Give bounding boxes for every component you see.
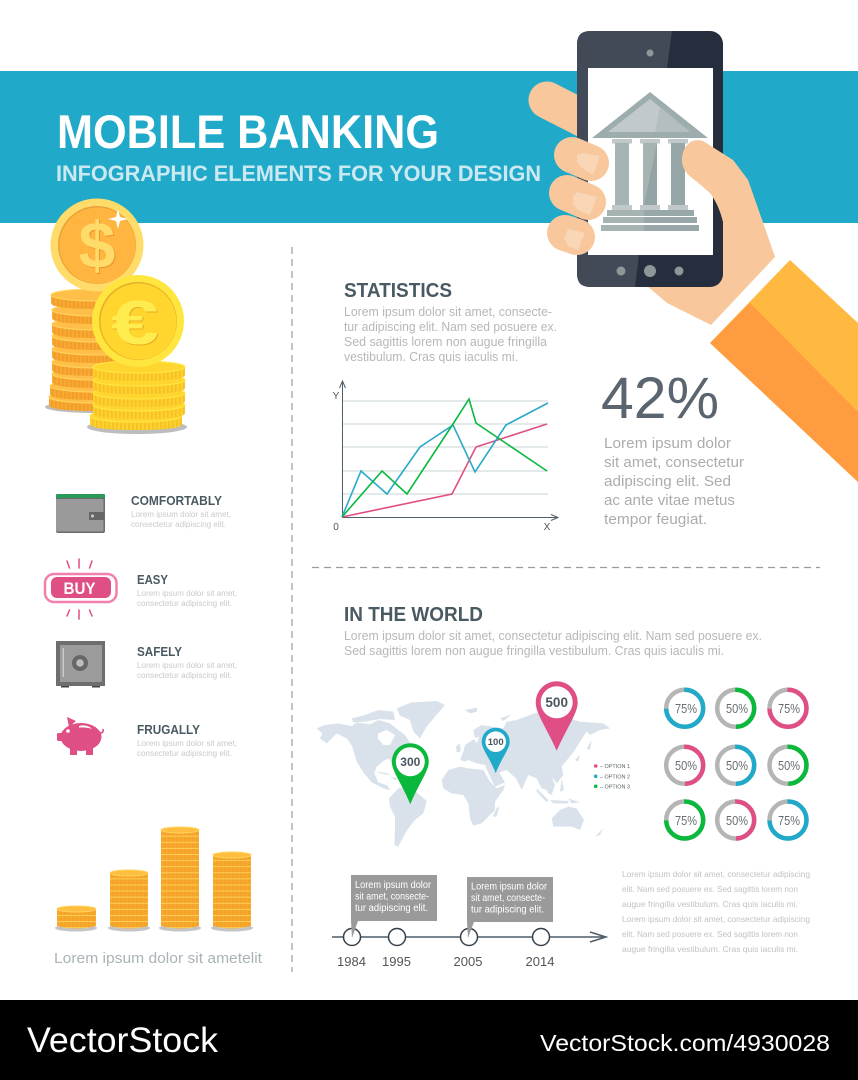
timeline years: 1984 xyxy=(337,954,366,969)
map pin: 300 xyxy=(392,743,429,804)
feature: frugally: FRUGALLY xyxy=(137,723,201,737)
icon: wallet xyxy=(56,494,105,533)
map legend: – OPTION 1 xyxy=(600,764,630,770)
donut: blue 75%: 75% xyxy=(675,701,697,716)
timeline years: 2014 xyxy=(526,954,554,969)
side paragraph: Lorem ipsum dolor sit amet, consectetur adipiscing xyxy=(622,914,810,924)
coins illustration xyxy=(45,198,187,434)
feature: easy: consectetur adipiscing elit. xyxy=(137,599,232,608)
stat description: Lorem ipsum dolor xyxy=(604,436,731,452)
icon: piggy bank xyxy=(57,717,103,755)
donut: pink 50% xyxy=(666,747,703,784)
stat description: adipiscing elit. Sed xyxy=(604,474,731,490)
feature: safely: SAFELY xyxy=(137,645,183,659)
donut: blue 50% xyxy=(717,747,754,784)
callout: 2005: tur adipiscing elit. xyxy=(471,904,544,916)
sleeve xyxy=(710,260,858,482)
feature: safely: Lorem ipsum dolor sit amet, xyxy=(137,661,237,670)
donut: blue 50%: 50% xyxy=(726,758,748,773)
phone xyxy=(577,31,723,287)
feature: comfortably xyxy=(56,494,231,533)
donut: blue 75% xyxy=(666,690,703,727)
statistics text: vestibulum. Cras quis iaculis mi. xyxy=(344,350,518,364)
callout: 1984: tur adipiscing elit. xyxy=(355,903,428,914)
feature: safely xyxy=(56,641,237,688)
footer logo: VectorStock xyxy=(27,1021,219,1060)
feature: comfortably: Lorem ipsum dolor sit amet, xyxy=(131,510,231,519)
world text: Lorem ipsum dolor sit amet, consectetur adipiscing elit. Nam sed posuere ex. xyxy=(344,629,762,643)
stat description: sit amet, consectetur xyxy=(604,455,744,471)
world map xyxy=(317,701,610,847)
icon: buy button xyxy=(45,559,116,619)
coin stack: orange xyxy=(45,289,144,413)
map legend: – OPTION 2 xyxy=(600,774,630,780)
donut: green 50% second: 50% xyxy=(778,758,800,773)
side paragraph: elit. Nam sed posuere ex. Sed sagittis lorem non xyxy=(622,884,798,894)
map legend: – OPTION 3 xyxy=(600,784,630,790)
donut: green 75%: 75% xyxy=(675,813,697,828)
feature: frugally: Lorem ipsum dolor sit amet, xyxy=(137,739,237,748)
callout: 2005: sit amet, consecte- xyxy=(471,893,545,904)
callout: 2005: Lorem ipsum dolor xyxy=(471,882,548,892)
donut: pink 50%: 50% xyxy=(675,758,697,773)
timeline xyxy=(332,875,606,969)
side paragraph xyxy=(622,869,810,954)
world text xyxy=(344,629,762,658)
donut: green 75% xyxy=(666,802,703,838)
callout: 2005 xyxy=(467,877,553,938)
title: MOBILE BANKING xyxy=(57,105,439,158)
world text: Sed sagittis lorem non augue fringilla vestibulum. Cras quis iaculis mi. xyxy=(344,644,724,658)
feature: easy: EASY xyxy=(137,573,169,587)
donut: pink 75%: 75% xyxy=(778,701,800,716)
coin: dollar xyxy=(50,198,144,292)
icon: bank building xyxy=(592,92,708,231)
stat description xyxy=(604,436,744,528)
line chart xyxy=(333,381,558,533)
map legend xyxy=(594,764,630,790)
thumb xyxy=(682,140,775,260)
donut charts xyxy=(666,690,806,838)
callout: 1984: Lorem ipsum dolor xyxy=(355,880,432,891)
coin stack: yellow xyxy=(87,361,187,434)
eurasia africa australia xyxy=(442,708,610,837)
line chart: Y xyxy=(333,391,340,402)
statistics text: Lorem ipsum dolor sit amet, consecte- xyxy=(344,305,552,319)
donut: green 50%: 50% xyxy=(726,701,748,716)
americas xyxy=(317,701,445,847)
statistics text: tur adipiscing elit. Nam sed posuere ex. xyxy=(344,320,557,334)
coin chart caption: Lorem ipsum dolor sit ametelit xyxy=(54,950,263,967)
map pin: 100: 100 xyxy=(488,737,504,748)
donut: green 50% xyxy=(717,690,754,727)
map pin: 500: 500 xyxy=(545,695,568,710)
callout: 1984: sit amet, consecte- xyxy=(355,892,429,902)
map pin: 100 xyxy=(482,728,510,773)
line chart: 0 xyxy=(333,522,339,533)
subtitle: INFOGRAPHIC ELEMENTS FOR YOUR DESIGN xyxy=(56,161,541,186)
donut: blue 75% second xyxy=(770,802,806,838)
feature: easy xyxy=(45,559,237,619)
heading: in the world: IN THE WORLD xyxy=(344,604,483,626)
feature: frugally xyxy=(57,717,237,758)
statistics text xyxy=(344,305,557,364)
footer bar xyxy=(0,1000,858,1080)
feature: frugally: consectetur adipiscing elit. xyxy=(137,749,232,758)
side paragraph: augue fringilla vestibulum. Cras quis iaculis mi. xyxy=(622,899,798,909)
feature: comfortably: consectetur adipiscing elit. xyxy=(131,520,226,529)
timeline years xyxy=(337,954,554,969)
icon: safe xyxy=(56,641,105,688)
donut: blue 75% second: 75% xyxy=(778,813,800,828)
side paragraph: elit. Nam sed posuere ex. Sed sagittis lorem non xyxy=(622,929,798,939)
donut: pink 50% second xyxy=(717,802,754,838)
heading: statistics: STATISTICS xyxy=(344,280,452,302)
index finger behind phone xyxy=(547,100,590,122)
stat description: tempor feugiat. xyxy=(604,512,707,528)
footer url: VectorStock.com/4930028 xyxy=(540,1030,830,1056)
middle finger xyxy=(572,153,600,175)
stat description: ac ante vitae metus xyxy=(604,493,735,509)
feature: comfortably: COMFORTABLY xyxy=(131,494,223,508)
map pin: 300: 300 xyxy=(400,755,421,769)
feature: safely: consectetur adipiscing elit. xyxy=(137,671,232,680)
coin: euro: € xyxy=(111,289,159,358)
side paragraph: Lorem ipsum dolor sit amet, consectetur adipiscing xyxy=(622,869,810,879)
feature: easy: Lorem ipsum dolor sit amet, xyxy=(137,589,237,598)
donut: pink 50% second: 50% xyxy=(726,813,748,828)
side paragraph: augue fringilla vestibulum. Cras quis iaculis mi. xyxy=(622,944,798,954)
hand holding phone xyxy=(547,31,775,325)
coin: dollar: $ xyxy=(79,208,115,282)
timeline arrow xyxy=(332,932,606,942)
timeline years: 2005 xyxy=(454,954,482,969)
map pin: 500 xyxy=(536,681,578,751)
ring finger xyxy=(567,192,597,215)
coin: euro xyxy=(92,275,184,367)
callout: 1984 xyxy=(351,875,437,938)
donut: pink 75% xyxy=(770,690,806,727)
little finger xyxy=(564,229,585,250)
line chart: X xyxy=(544,522,551,533)
header banner xyxy=(0,71,858,223)
statistics text: Sed sagittis lorem non augue fringilla xyxy=(344,335,547,349)
timeline years: 1995 xyxy=(382,954,411,969)
donut: green 50% second xyxy=(770,747,806,784)
big stat: 42%: 42% xyxy=(601,366,719,431)
icon: buy button: BUY xyxy=(64,579,96,598)
coin stacks bar chart xyxy=(55,827,253,932)
palm xyxy=(640,160,775,325)
